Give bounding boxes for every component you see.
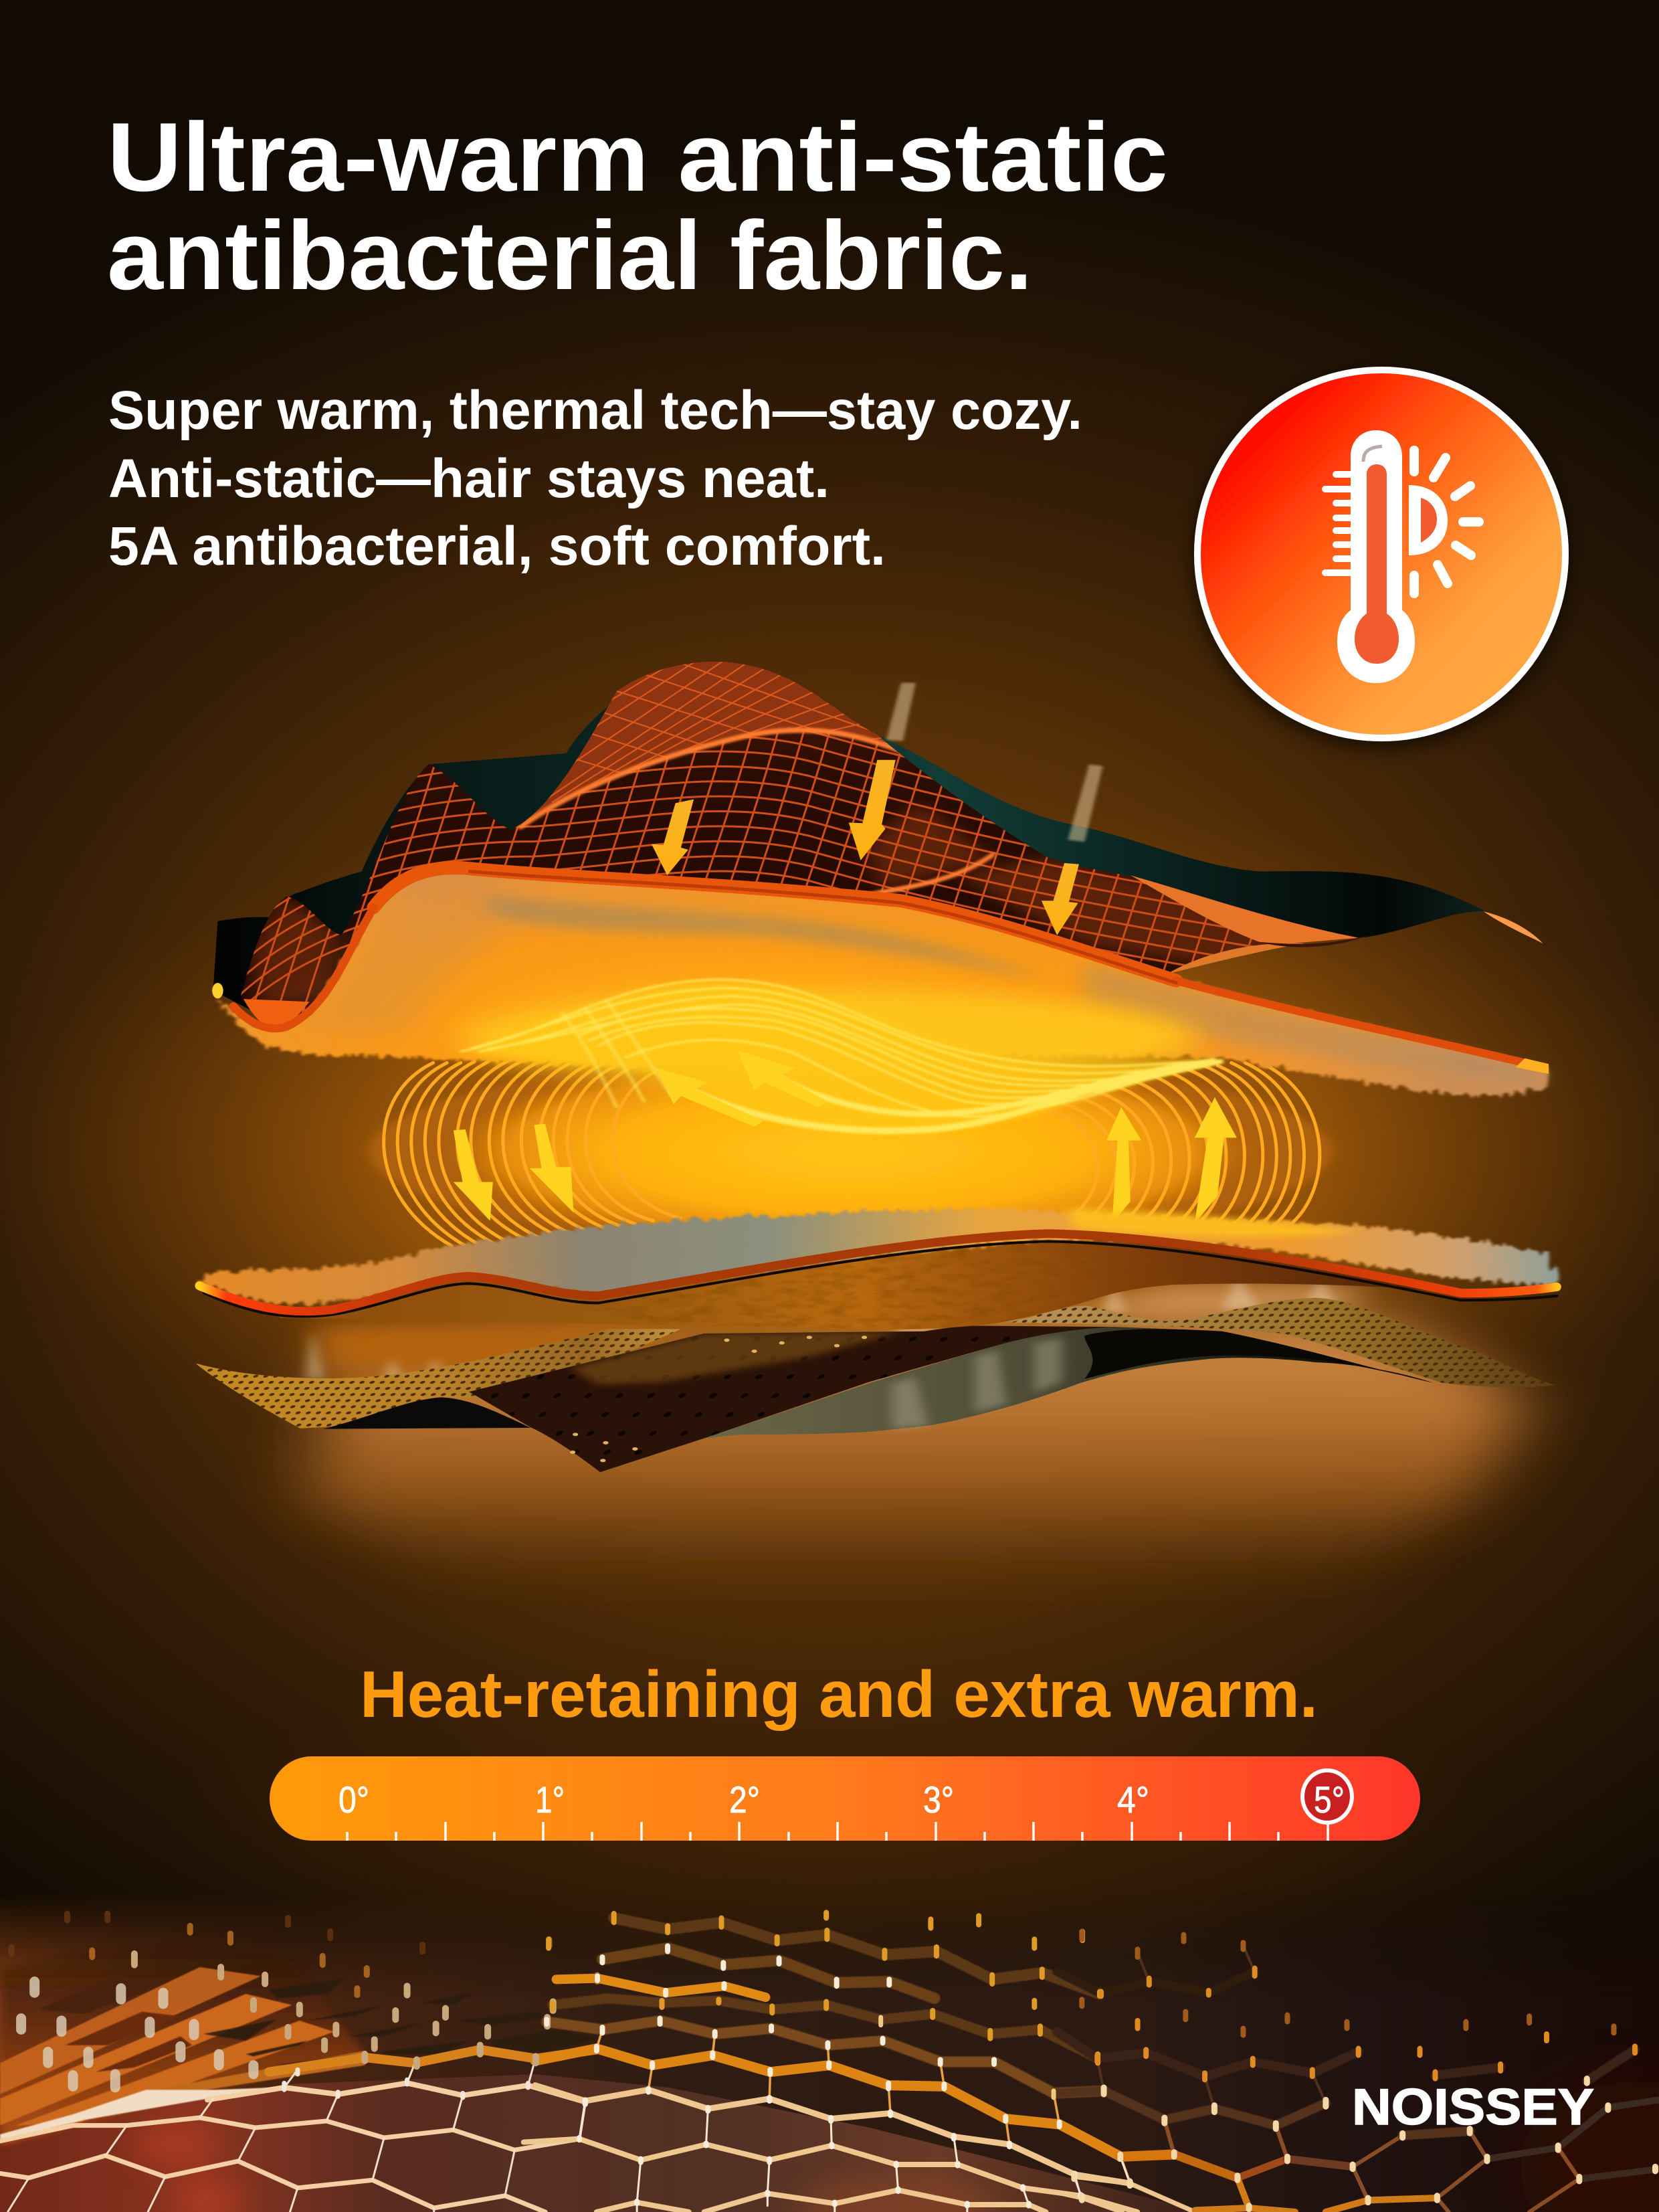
hex lines centre section <box>524 1918 1137 2212</box>
heat rays: light beams <box>886 682 1103 842</box>
mesh swoosh highlights <box>520 730 910 827</box>
fan bands <box>0 1967 365 2126</box>
hex lines right section <box>1057 1946 1659 2212</box>
scale labels: 4° <box>1117 1778 1149 1821</box>
lower fleece underside <box>250 1238 1465 1329</box>
text block: benefits <box>108 380 1082 577</box>
hex warm spot <box>796 2179 997 2212</box>
panel light streaks <box>892 1338 1062 1429</box>
hex left fan <box>0 1942 595 2146</box>
title <box>107 102 1168 310</box>
scale labels: 2° <box>729 1778 760 1821</box>
glow under bottom layer <box>305 1313 1525 1590</box>
fleece yellow centre glow <box>461 991 1195 1085</box>
top mesh grid layer <box>241 662 1268 1016</box>
fan red cells <box>38 1976 192 2072</box>
fan base <box>0 1942 365 2146</box>
fabric layers illustration <box>0 632 1659 1590</box>
text block: benefits: 5A antibacterial, soft comfort. <box>108 516 886 577</box>
hex node dashes right <box>1074 1932 1655 2209</box>
title: antibacterial fabric. <box>107 201 1033 310</box>
heat wave streams <box>461 980 1222 1131</box>
lower fleece layer <box>199 1208 1557 1304</box>
heat rings right <box>1039 1063 1320 1226</box>
title: Ultra-warm anti-static <box>107 102 1168 211</box>
black band <box>1084 1329 1433 1383</box>
upper rim <box>374 868 1176 981</box>
lower fleece rim <box>199 1234 1557 1317</box>
upper fleece layer <box>212 868 1549 1096</box>
fan dark cells <box>203 1978 595 2065</box>
scale highlight 5 degrees <box>1302 1770 1352 1823</box>
temperature scale bar <box>270 1756 1420 1841</box>
scale labels: 0° <box>338 1778 369 1821</box>
hex red hot spots <box>134 2121 244 2212</box>
hex dark red corner <box>1519 2081 1659 2212</box>
underside texture <box>553 1238 1175 1329</box>
inner panel <box>704 1327 1433 1439</box>
fleece tan shading <box>305 883 1543 1085</box>
scale labels: 5° <box>1314 1778 1345 1821</box>
left golden mesh piece <box>195 1329 681 1428</box>
scale labels <box>338 1778 1345 1821</box>
hexagon mesh floor <box>0 1873 1659 2212</box>
icon: thermometer badge <box>1197 370 1565 738</box>
mesh hump <box>523 662 890 824</box>
hex node dashes left <box>11 1914 597 2104</box>
fan bright flare <box>0 2087 284 2141</box>
right golden mesh piece <box>1011 1298 1555 1387</box>
warm core glow <box>447 1052 1254 1251</box>
heading: heat-retaining: Heat-retaining and extra warm. <box>360 1657 1318 1731</box>
brand logo: NOISSEY <box>1352 2079 1594 2136</box>
hex node dashes centre <box>547 1912 1131 2206</box>
mesh dense orange glow areas <box>250 802 1351 1013</box>
scale labels: 3° <box>923 1778 954 1821</box>
bottom perforated layer <box>195 1298 1555 1472</box>
perforation light holes <box>570 1335 867 1462</box>
text block: benefits: Super warm, thermal tech—stay cozy. <box>108 380 1082 441</box>
background glow near scale <box>161 1666 1498 1974</box>
warm glow between lower layers <box>314 1285 1360 1374</box>
top mesh back layer <box>213 662 1543 1024</box>
ring bed glow <box>369 1056 1332 1247</box>
heat rings left <box>384 1062 681 1246</box>
heat wave glow <box>470 982 1222 1133</box>
scale labels: 1° <box>535 1778 565 1821</box>
scale ticks <box>347 1822 1328 1841</box>
arrows: heat moving down <box>652 760 1079 935</box>
glow behind layers <box>0 786 1659 1517</box>
hex lower cell surface <box>0 2074 1204 2212</box>
steam wisps <box>305 1273 1337 1382</box>
perforated warm transition <box>571 1331 901 1384</box>
hex upper cell surface <box>0 1873 1659 2212</box>
black fold <box>323 1397 530 1429</box>
text block: benefits: Anti-static—hair stays neat. <box>108 448 830 509</box>
dark perforated piece <box>469 1325 1114 1472</box>
arrows: circulating heat <box>454 1050 1237 1224</box>
hex lines left section <box>0 2049 597 2212</box>
mesh edge highlights <box>243 875 1543 1030</box>
